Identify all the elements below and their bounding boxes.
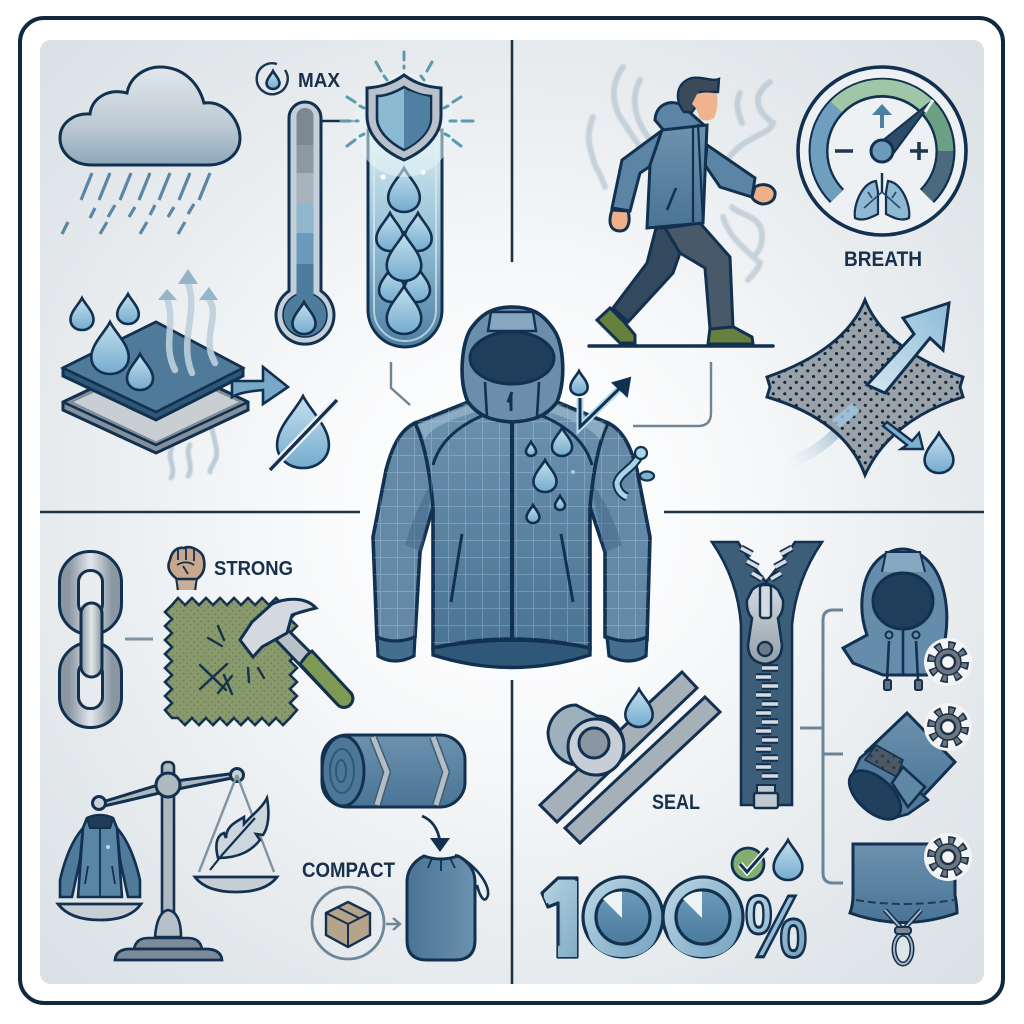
head hair [678,78,719,112]
connector line [633,362,711,426]
icon: rain cloud [60,67,240,234]
panel: strength and weight (bottom left) [58,307,972,981]
label: BREATH: BREATH [844,248,922,271]
icon: MAX rating badge [257,63,341,94]
face [692,92,717,120]
icon: adjustable cuff [841,713,955,828]
percent sign: % [745,877,807,976]
icon: perforated fabric [767,300,963,475]
icon: gear 2 [924,703,972,751]
label: STRONG: STRONG [214,558,293,580]
zipper slider [747,584,783,664]
left cuff [377,637,415,661]
zip [510,418,514,642]
left pan [58,904,141,920]
hood [655,103,704,135]
label: MAX: MAX [298,70,341,92]
icon: check mark [732,848,768,880]
label: SEAL: SEAL [652,791,700,814]
icon: seam tape [540,672,720,843]
icon: breathability gauge [798,67,966,235]
panel: waterproofing (top left) [60,52,473,478]
icon: balance scale [58,762,277,960]
figure: walking person [589,78,775,346]
icon: lungs [855,173,909,219]
rear arm [612,132,670,211]
numeral one: 1 [536,858,598,981]
icon: shield [367,75,441,160]
icon: adjustable hem [850,844,957,964]
front shoe [708,325,753,344]
icon: packed box in circle [312,887,400,959]
hood [462,307,563,422]
water beads [552,428,572,456]
icon: hammer [240,599,353,707]
back leg [613,226,690,322]
icon: feather [210,798,268,870]
arrow: roll to pack [422,816,450,852]
icon: shield rating tube [341,52,473,347]
icon: vapour wisps [589,67,773,280]
hem [433,640,590,668]
left sleeve [373,423,433,643]
icon: zipper [712,542,822,808]
icon: fabric swatch [165,598,297,725]
front hand [752,185,775,204]
pockets [451,534,573,602]
icon: adjustable hood [843,549,947,690]
rear hand [610,210,629,231]
icon: gear 3 [924,833,972,881]
back shoe [597,308,635,343]
numeral zero: 0 [580,859,666,980]
connector line [391,362,410,405]
icon: membrane layers [63,269,288,478]
icon: gear 1 [924,638,972,686]
wavy vapour below layers [170,400,217,478]
100 percent figure [540,875,807,959]
icon: rolled jacket [322,735,465,807]
icon: drop [774,840,802,880]
front leg [665,223,733,329]
ground line [589,344,773,348]
torso [415,402,608,648]
wavy vapour arrows above layer [167,281,215,373]
arrow: water repel [580,378,630,427]
front arm [705,145,755,197]
icon: small jacket [60,815,140,897]
icon: stuff sack [407,855,488,960]
bracket connector [800,610,843,883]
right cuff [607,637,647,661]
icon: crossed-out drop [270,396,337,470]
central jacket [373,307,654,668]
label: COMPACT: COMPACT [302,859,395,882]
right pan [195,877,277,892]
icon: thermometer gauge [276,102,358,344]
water splash [617,447,654,497]
icon: fist [168,547,204,590]
numeral zero: 0 [660,859,746,980]
panel: sealing and adjustability (bottom right) [536,542,972,981]
right sleeve [590,423,650,643]
panel: breathability (top right) [589,67,966,475]
icon: chain links [69,561,112,718]
numeral one [540,876,579,959]
torso [647,125,707,228]
